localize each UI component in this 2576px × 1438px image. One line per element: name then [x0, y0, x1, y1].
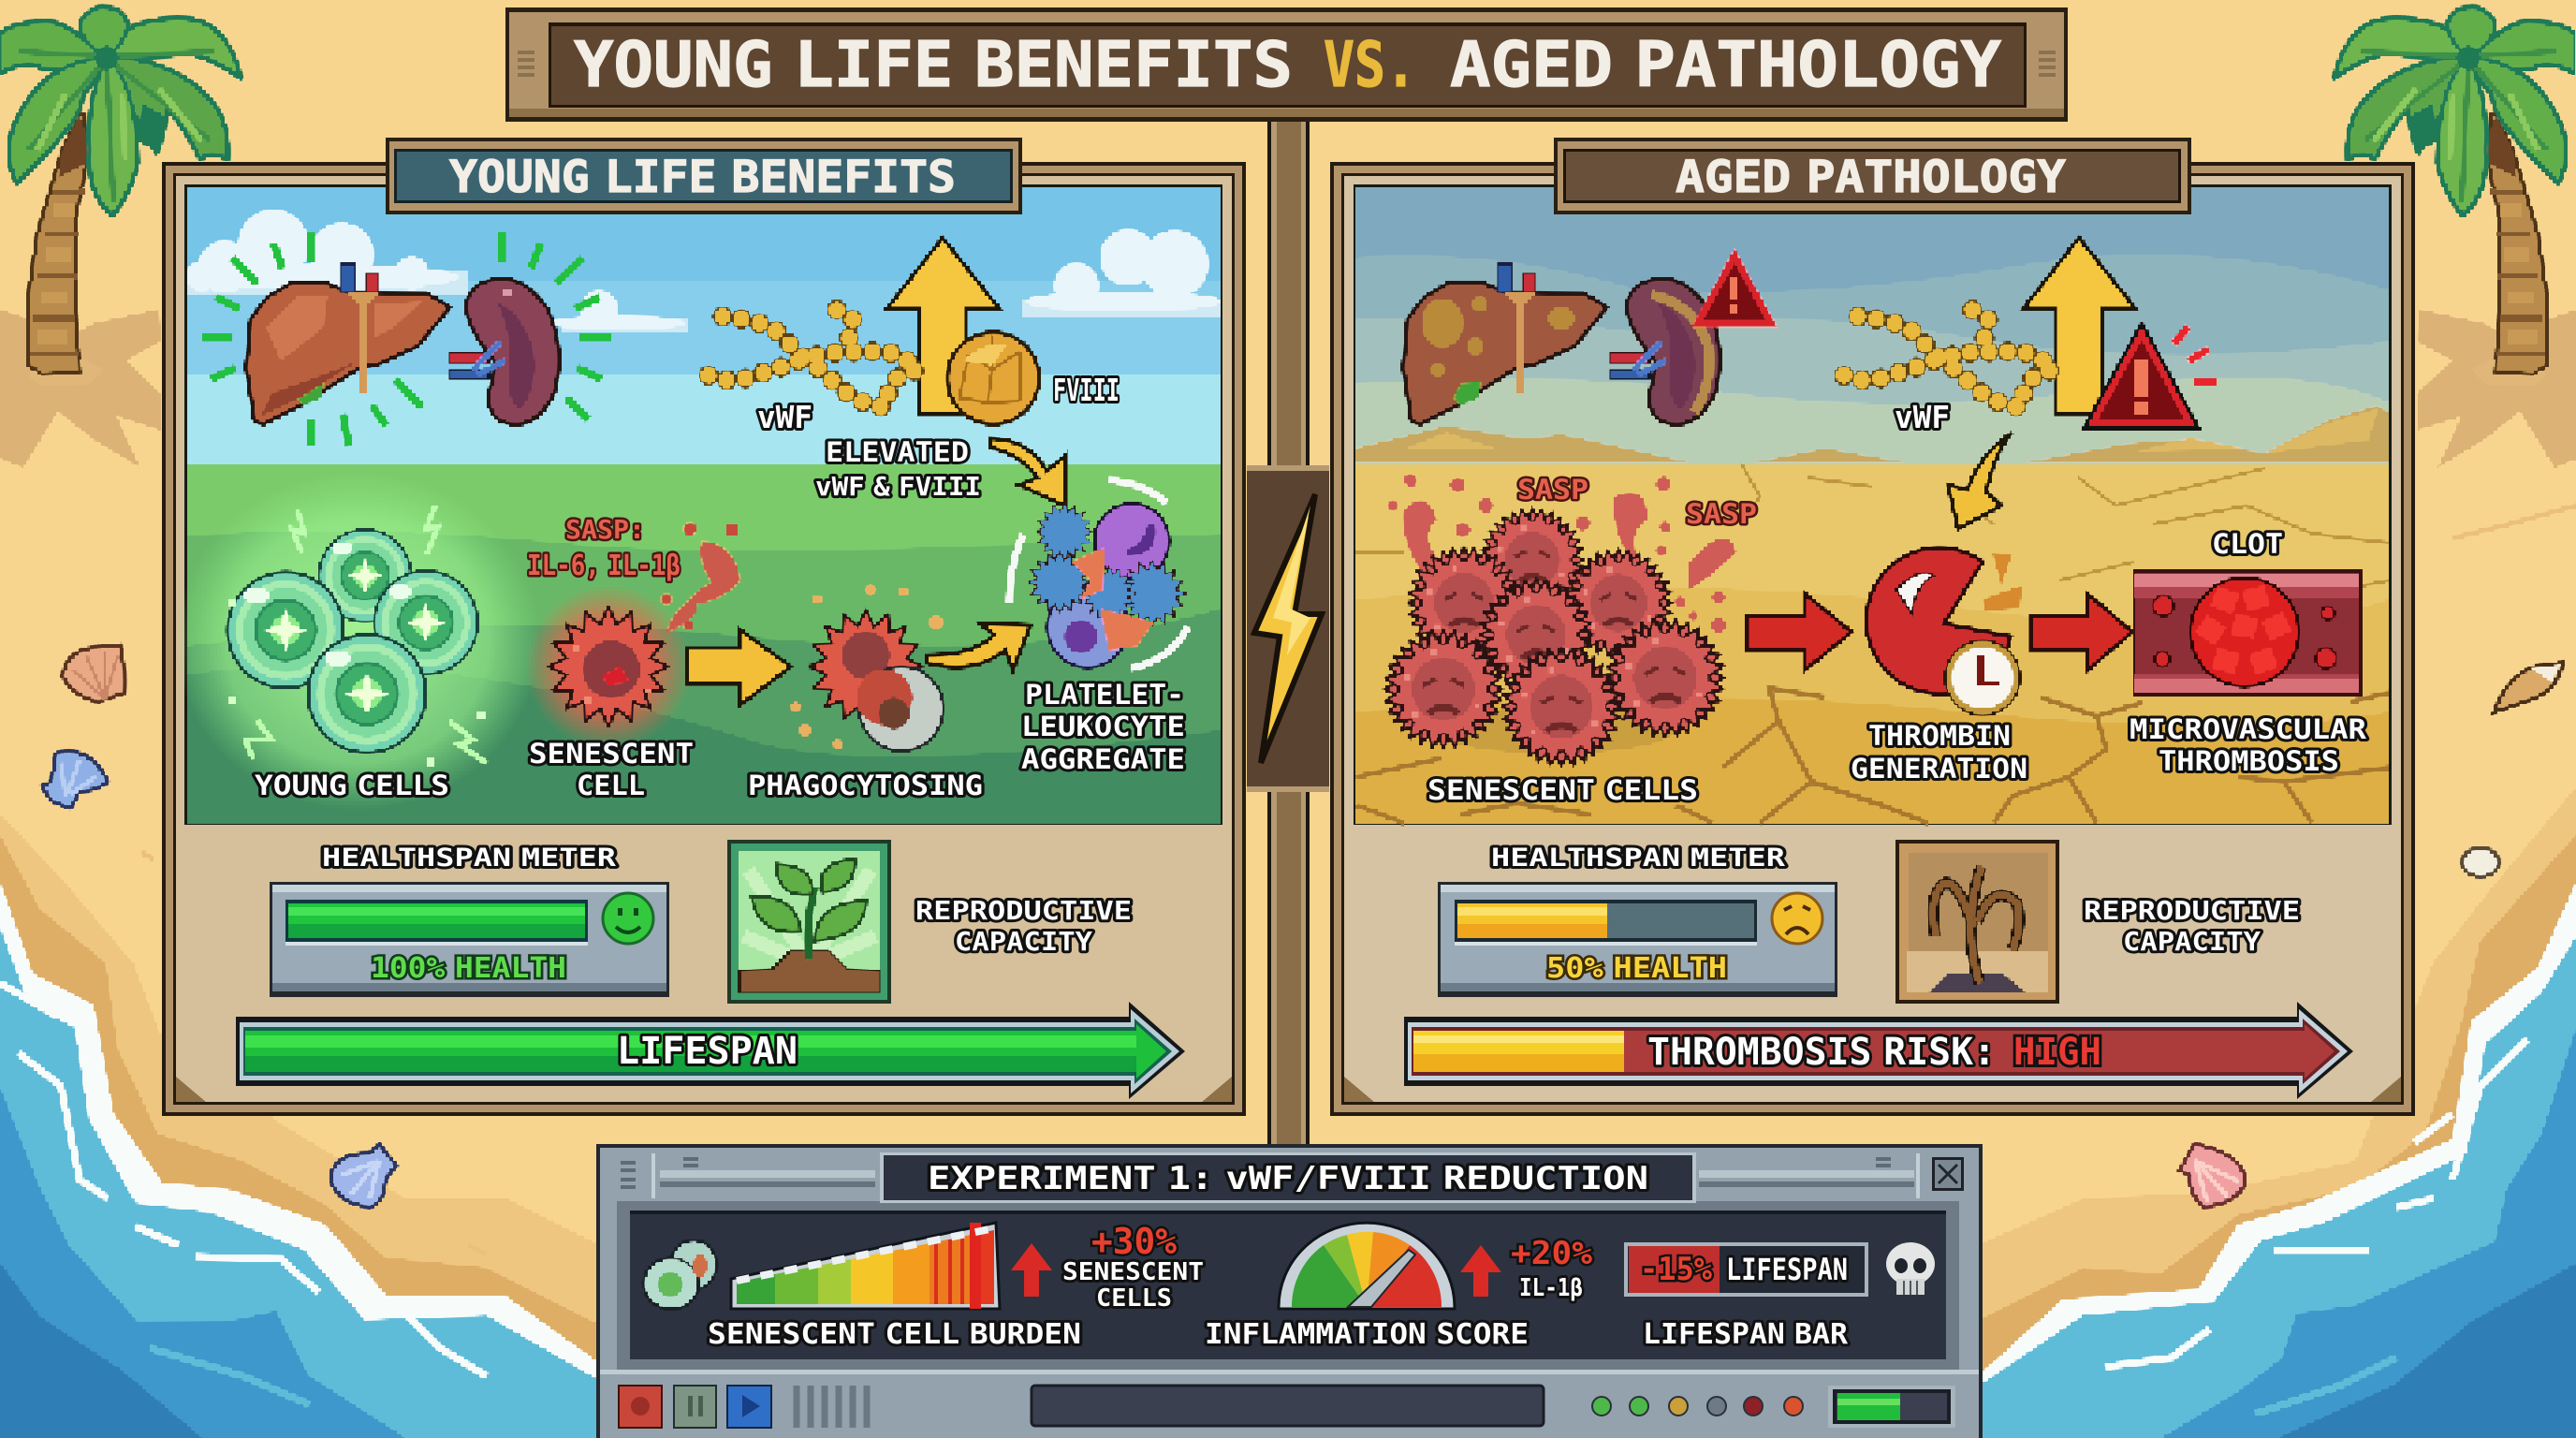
vWF chain and arrow [2024, 238, 2135, 415]
scene labels: LEUKOCYTE [1021, 711, 1185, 742]
arrow up: senescent [1011, 1243, 1052, 1297]
heading: aged pathology: AGED PATHOLOGY [1676, 152, 2067, 203]
shell: lower blue [330, 1145, 396, 1207]
phagocytosing cell [791, 585, 944, 751]
wet sand [0, 786, 2576, 1438]
shell: pink [2180, 1144, 2246, 1207]
senescent cell burden wedge [731, 1223, 1000, 1309]
warning triangle large [2087, 327, 2217, 426]
lifespan bar [1624, 1242, 1868, 1297]
icon: petri dishes [644, 1240, 716, 1309]
thrombosis risk arrow: THROMBOSIS RISK: [1647, 1031, 1996, 1074]
panel: young life benefits [162, 138, 1246, 1116]
icon: sad face [1772, 893, 1822, 944]
control strip: progress slot [1032, 1386, 1544, 1426]
palm shadows [0, 309, 161, 468]
palm tree left [0, 7, 241, 386]
FVIII ball [947, 332, 1039, 424]
health rays [203, 232, 612, 447]
palm tree right [2334, 7, 2575, 386]
stat: +30% senescent cells: SENESCENT [1062, 1258, 1204, 1286]
icon: skull [1886, 1242, 1935, 1295]
scene labels [255, 372, 1185, 801]
scene labels: CLOT [2212, 528, 2283, 560]
healthspan meter: 50%: HEALTHSPAN METER [1491, 844, 1786, 873]
senescent cell [526, 584, 691, 749]
stat: +30% senescent cells [1062, 1221, 1204, 1313]
control strip: buttons [619, 1386, 771, 1428]
clouds [186, 210, 1222, 331]
lifespan bar: -15% [1640, 1251, 1712, 1288]
label: reproductive capacity: CAPACITY [955, 926, 1092, 957]
SASP smoke [1387, 474, 1736, 633]
shell: peach [63, 645, 124, 701]
scene labels: ELEVATED [826, 436, 969, 468]
label: inflammation score: INFLAMMATION SCORE [1205, 1318, 1529, 1351]
arrow to thrombin [1948, 433, 2012, 529]
young scene [175, 187, 1222, 823]
senescent cells cluster [1374, 499, 1734, 776]
platelet-leukocyte aggregate [1009, 480, 1188, 668]
inflammation gauge [1279, 1223, 1455, 1309]
stat: +20% IL-1β [1511, 1235, 1593, 1302]
frame [1330, 162, 2415, 1116]
scene labels: SASP: [565, 514, 645, 545]
arrow: phagocytosing to aggregate [927, 624, 1031, 670]
arrow up: inflammation [1460, 1245, 1501, 1297]
foam streaks [0, 983, 2527, 1376]
liver healthy [246, 264, 450, 424]
healthspan meter: 100% [270, 844, 669, 997]
scene labels: PLATELET- [1025, 679, 1184, 711]
control strip: power indicator [1828, 1386, 1955, 1428]
label: reproductive capacity: REPRODUCTIVE [915, 895, 1132, 926]
scene labels: vWF & FVIII [815, 471, 981, 502]
darker wet sand band [0, 834, 2576, 1438]
stat: +20% IL-1β: IL-1β [1519, 1274, 1583, 1302]
kidney healthy [449, 279, 559, 424]
arrow: senescent to phagocytosing [687, 630, 791, 705]
lifespan bar: LIFESPAN [1726, 1252, 1848, 1287]
icon: happy face [603, 893, 653, 944]
pebble [2463, 848, 2498, 876]
blood vessel and clot [2134, 571, 2360, 696]
scene labels: THROMBIN [1868, 720, 2011, 752]
scene labels: CELL [577, 770, 645, 801]
aged scene [1356, 187, 2389, 823]
heading: young life benefits: YOUNG LIFE BENEFITS [449, 152, 956, 203]
label: senescent cell burden: SENESCENT CELL BURDEN [708, 1318, 1081, 1351]
panel: aged pathology [1330, 138, 2415, 1116]
shell: tan [2495, 663, 2563, 712]
experiment title [880, 1152, 1696, 1203]
deep water [0, 1262, 2576, 1438]
healthspan meter: 100%: HEALTHSPAN METER [322, 844, 617, 873]
scene labels: vWF [757, 399, 812, 435]
SASP smoke [661, 522, 740, 633]
shallow water [0, 927, 2576, 1438]
lifespan arrow: LIFESPAN [617, 1030, 798, 1073]
cracks [1356, 463, 2389, 599]
scene labels: MICROVASCULAR [2130, 713, 2367, 745]
thrombin pacman [1866, 548, 2022, 715]
thrombosis risk arrow: HIGH [2013, 1031, 2101, 1074]
sand speckles [56, 506, 2576, 1255]
red arrow 1 [1748, 594, 1852, 670]
scene labels: THROMBOSIS [2159, 745, 2339, 777]
scene labels: SENESCENT CELLS [1427, 774, 1698, 806]
red arrow 2 [2030, 594, 2132, 670]
heading: aged pathology [1554, 138, 2191, 214]
heading: young life benefits [386, 138, 1022, 214]
label: reproductive capacity [2084, 895, 2300, 957]
young cells [227, 506, 487, 766]
main title banner [505, 7, 2068, 122]
mid blue water [0, 1027, 2576, 1438]
main title banner: AGED PATHOLOGY [1450, 28, 2002, 101]
shell: blue [42, 752, 108, 808]
label: lifespan bar: LIFESPAN BAR [1643, 1318, 1849, 1351]
main title banner: YOUNG LIFE BENEFITS [574, 28, 1293, 101]
healthspan meter: 100%: 100% HEALTH [371, 952, 566, 985]
scene labels: PHAGOCYTOSING [748, 770, 983, 801]
control strip: grille [797, 1386, 867, 1428]
aged liver [1403, 264, 1607, 424]
scene labels: IL-6, IL-1β [527, 550, 681, 582]
aged kidney [1610, 279, 1720, 424]
stat: +20% IL-1β: +20% [1511, 1235, 1593, 1272]
center divider post [1247, 120, 1329, 1150]
scene labels: YOUNG CELLS [255, 770, 449, 801]
scene labels: SASP [1686, 498, 1757, 530]
thrombosis risk arrow [1404, 1002, 2353, 1099]
healthspan meter: 50% [1438, 844, 1837, 997]
lifespan arrow [236, 1002, 1185, 1099]
close button [1932, 1157, 1964, 1191]
scene labels: vWF [1895, 399, 1950, 435]
panel: experiment 1 [596, 1144, 1983, 1438]
scene labels: AGGREGATE [1021, 743, 1185, 775]
young cells glow [175, 473, 540, 810]
healthspan meter: 50%: 50% HEALTH [1546, 952, 1727, 985]
vWF chain and arrow [887, 238, 999, 415]
label: reproductive capacity: CAPACITY [2123, 926, 2261, 957]
dunes [1356, 405, 2389, 462]
scene labels: GENERATION [1851, 753, 2027, 785]
stat: +30% senescent cells: +30% [1091, 1221, 1177, 1262]
foam [0, 883, 2576, 1438]
warning triangle small [1697, 256, 1772, 324]
main title banner: VS. [1324, 28, 1416, 101]
icon: lightning bolt [1254, 494, 1322, 763]
label: reproductive capacity [915, 895, 1132, 957]
elevated arrow [990, 438, 1066, 506]
frame [162, 162, 1246, 1116]
seashells and pebbles [42, 645, 2563, 1207]
icon: healthy sprout tile [728, 841, 891, 1005]
icon: withered plant tile [1896, 841, 2058, 1005]
scene labels: FVIII [1053, 372, 1120, 408]
scene labels [1427, 399, 2367, 806]
control strip: status LEDs [1592, 1397, 1803, 1416]
stat: +30% senescent cells: CELLS [1096, 1284, 1172, 1313]
label: reproductive capacity: REPRODUCTIVE [2084, 895, 2300, 926]
experiment title: EXPERIMENT 1: vWF/FVIII REDUCTION [928, 1160, 1648, 1197]
scene labels: SASP [1517, 474, 1588, 506]
icon: clock [1945, 640, 2020, 715]
window chrome [596, 1144, 1983, 1438]
scene labels: SENESCENT [529, 738, 694, 770]
